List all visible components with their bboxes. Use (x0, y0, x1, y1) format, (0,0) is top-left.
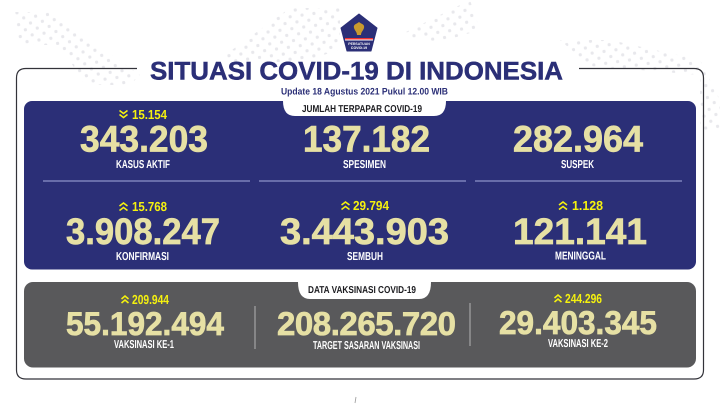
stat: kasus aktif (80, 107, 208, 171)
tab: jumlah terpapar heading (283, 101, 446, 116)
stat: konfirmasi (66, 199, 220, 263)
stat: meninggal: 121.141 (513, 211, 647, 252)
panel: jumlah terpapar (24, 101, 696, 270)
stat: vaksinasi ke-1: 209.944 (132, 292, 170, 307)
stat: suspek: 282.964 (513, 118, 643, 160)
stat: konfirmasi: KONFIRMASI (116, 251, 169, 263)
logo: Satgas emblem: PERSATUAN (348, 42, 370, 46)
stat: kasus aktif: 343.203 (80, 118, 208, 160)
stat: konfirmasi: 15.768 (132, 199, 167, 214)
tab: jumlah terpapar heading: JUMLAH TERPAPAR COVID-19 (302, 104, 422, 115)
stat: vaksinasi ke-1: VAKSINASI KE-1 (114, 339, 174, 351)
stat: kasus aktif: KASUS AKTIF (116, 159, 170, 171)
panel: data vaksinasi (24, 282, 696, 368)
update date subtitle: Update 18 Agustus 2021 Pukul 12.00 WIB (281, 86, 448, 98)
stat: vaksinasi ke-2 (499, 291, 657, 350)
stat: sembuh: 3.443.903 (280, 211, 449, 252)
stat: sembuh: 29.794 (353, 198, 390, 213)
stat: target sasaran vaksinasi: TARGET SASARAN VAKSINASI (313, 340, 420, 352)
logo: Satgas emblem: COVID-19 (351, 46, 367, 50)
title: SITUASI COVID-19 DI INDONESIA (150, 58, 563, 86)
stat: vaksinasi ke-1 (66, 292, 225, 351)
outer frame (16, 68, 704, 379)
tab: data vaksinasi heading: DATA VAKSINASI COVID-19 (308, 285, 416, 296)
stat: sembuh: SEMBUH (347, 251, 383, 263)
stat: kasus aktif: 15.154 (132, 107, 168, 122)
stat: vaksinasi ke-2: 29.403.345 (499, 304, 657, 341)
stat: vaksinasi ke-2: VAKSINASI KE-2 (548, 338, 608, 350)
stat: spesimen: SPESIMEN (343, 159, 386, 171)
stat: meninggal: MENINGGAL (555, 250, 606, 262)
stat: vaksinasi ke-1: 55.192.494 (66, 305, 225, 342)
stat: konfirmasi: 3.908.247 (66, 211, 220, 252)
stat: spesimen: 137.182 (303, 118, 430, 160)
stat: meninggal (513, 198, 647, 262)
tab: data vaksinasi heading (298, 282, 431, 299)
logo: Satgas emblem (341, 14, 377, 51)
stat: vaksinasi ke-2: 244.296 (565, 291, 602, 306)
stat: suspek: SUSPEK (561, 159, 594, 171)
stat: target sasaran vaksinasi: 208.265.720 (277, 305, 456, 342)
stat: sembuh (280, 198, 449, 263)
stat: meninggal: 1.128 (572, 198, 603, 213)
